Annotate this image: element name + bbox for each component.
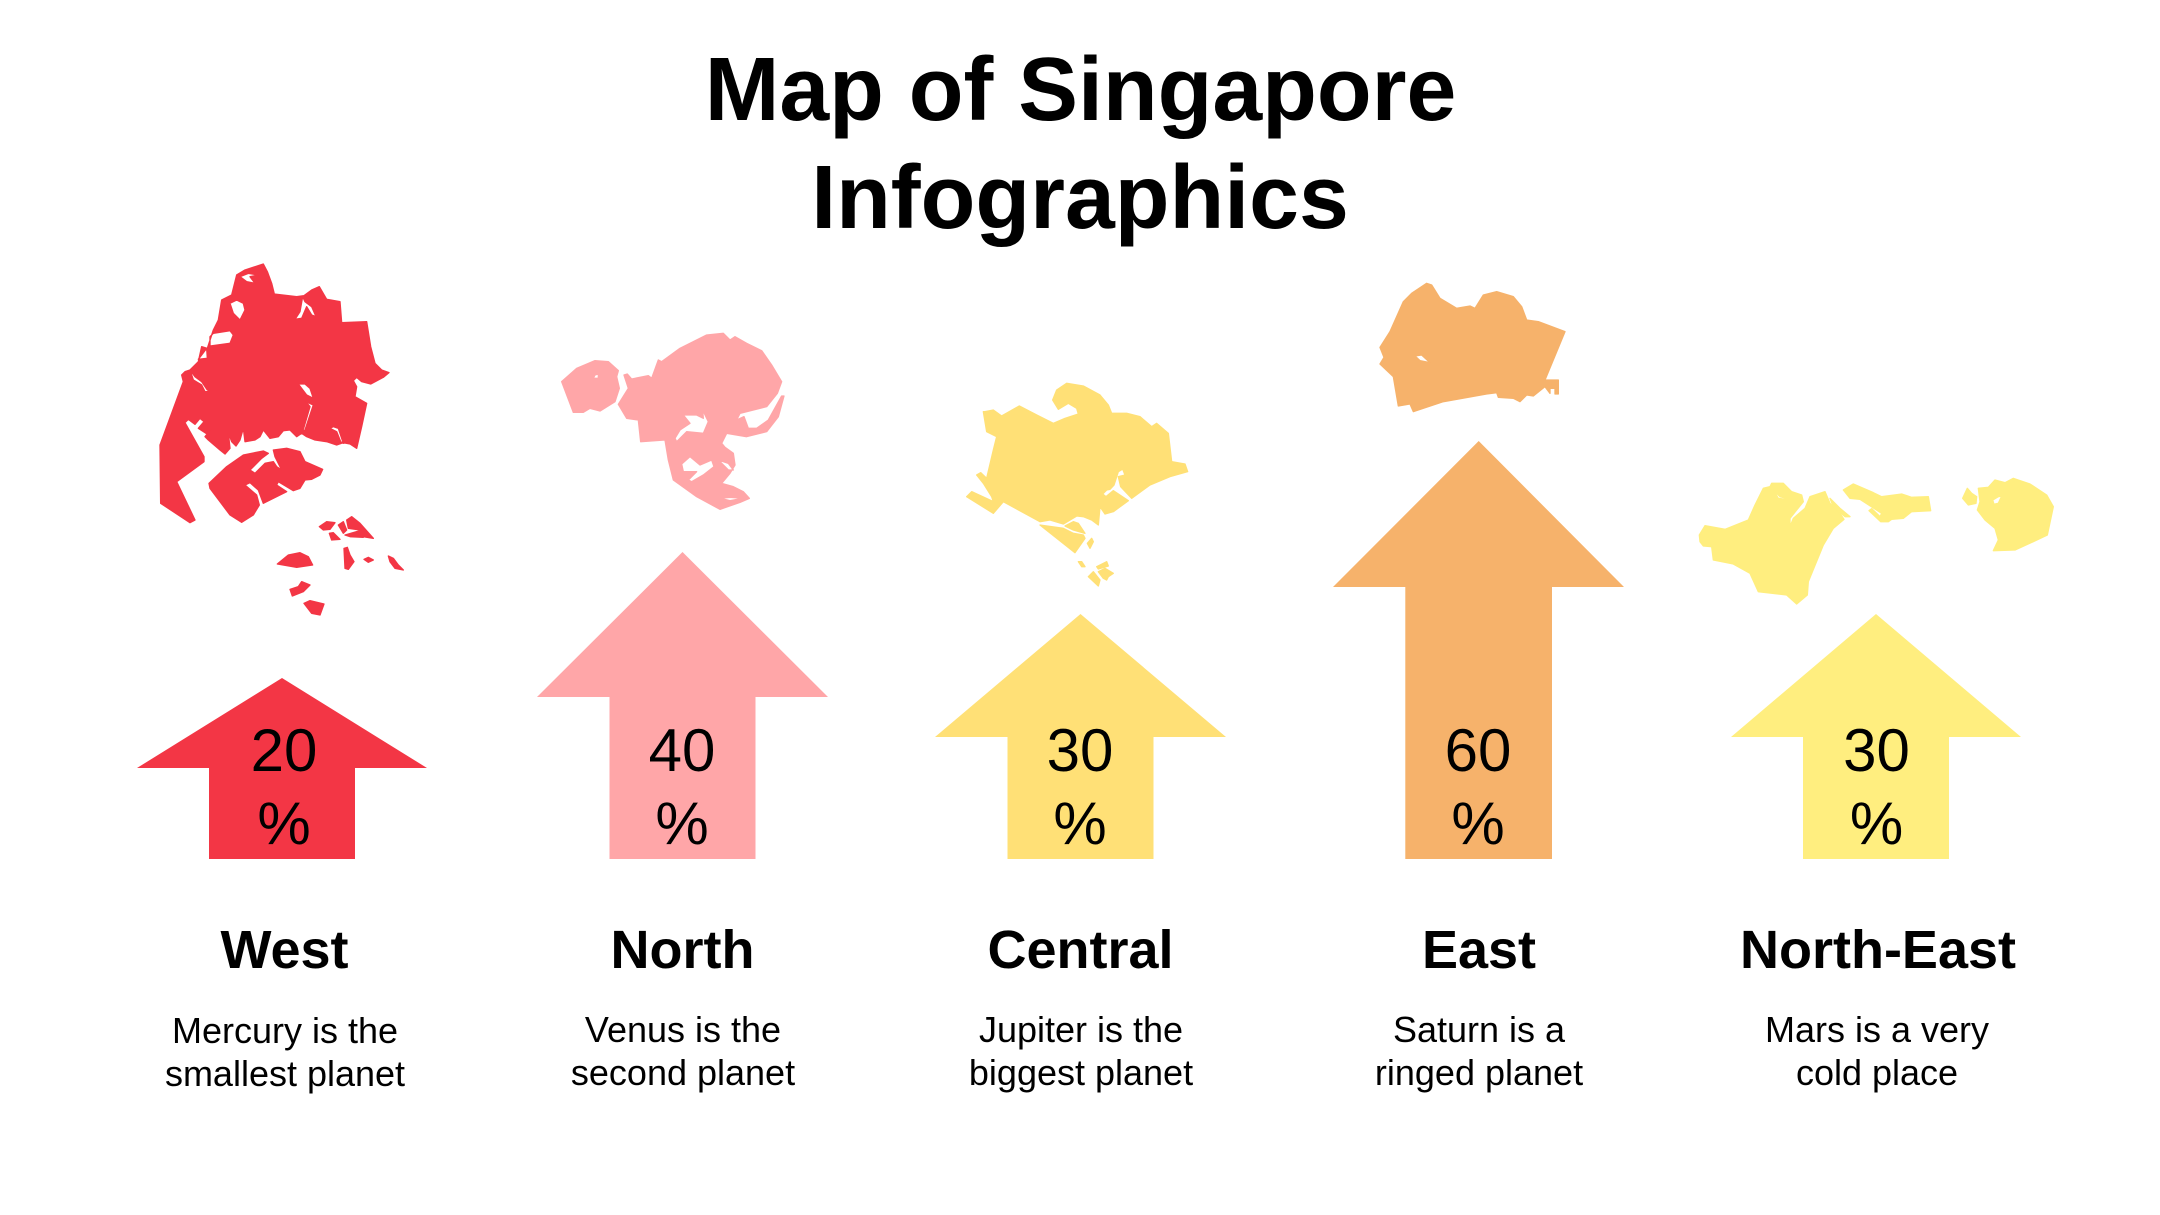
label: East: East — [1422, 920, 1536, 980]
panel: East — [1333, 283, 1624, 1093]
description: North — [571, 1009, 795, 1093]
panel: Central — [935, 383, 1226, 1093]
arrow: Central 30%: 30 — [1047, 717, 1113, 784]
description: North-East: Mars is a very — [1765, 1009, 1989, 1050]
title: Infographics — [811, 147, 1349, 247]
panel: North-East — [1699, 478, 2053, 1093]
title — [705, 39, 1456, 247]
description: North: Venus is the — [585, 1009, 781, 1050]
title: Map of Singapore — [705, 39, 1456, 139]
arrow: Central 30%: % — [1053, 790, 1107, 857]
arrow: West 20%: 20 — [251, 717, 317, 784]
label: Central: Central — [987, 920, 1174, 980]
description: West: smallest planet — [165, 1053, 405, 1094]
description: West — [165, 1010, 405, 1094]
arrow: East 60% — [1333, 441, 1624, 859]
map: North-East region — [1699, 478, 2053, 604]
description: East: ringed planet — [1375, 1052, 1583, 1093]
arrow: East 60%: 60 — [1445, 717, 1511, 784]
description: West: Mercury is the — [172, 1010, 398, 1051]
description: East — [1375, 1009, 1583, 1093]
label: West: West — [220, 920, 349, 980]
map: West region — [160, 264, 403, 615]
arrow: North-East 30%: 30 — [1843, 717, 1910, 784]
description: Central — [969, 1009, 1193, 1093]
map: East region — [1380, 283, 1565, 412]
panel: West — [137, 264, 427, 1094]
map: Central region — [967, 383, 1188, 586]
description: North-East: cold place — [1796, 1052, 1958, 1093]
arrow: North-East 30%: % — [1850, 790, 1903, 857]
arrow: North 40%: % — [655, 790, 709, 857]
arrow: North 40%: 40 — [649, 717, 715, 784]
description: North-East — [1765, 1009, 1989, 1093]
label: North: North — [611, 920, 754, 980]
arrow: Central 30% — [935, 614, 1226, 859]
arrow: West 20% — [137, 678, 427, 859]
description: Central: biggest planet — [969, 1052, 1193, 1093]
description: East: Saturn is a — [1393, 1009, 1566, 1050]
panel: North — [537, 333, 828, 1093]
arrow: North 40% — [537, 552, 828, 859]
description: North: second planet — [571, 1052, 795, 1093]
arrow: West 20%: % — [257, 790, 311, 857]
arrow: East 60%: % — [1451, 790, 1505, 857]
label: North-East: North-East — [1740, 920, 2016, 980]
map: North region — [562, 333, 784, 509]
description: Central: Jupiter is the — [979, 1009, 1183, 1050]
arrow: North-East 30% — [1731, 614, 2021, 859]
